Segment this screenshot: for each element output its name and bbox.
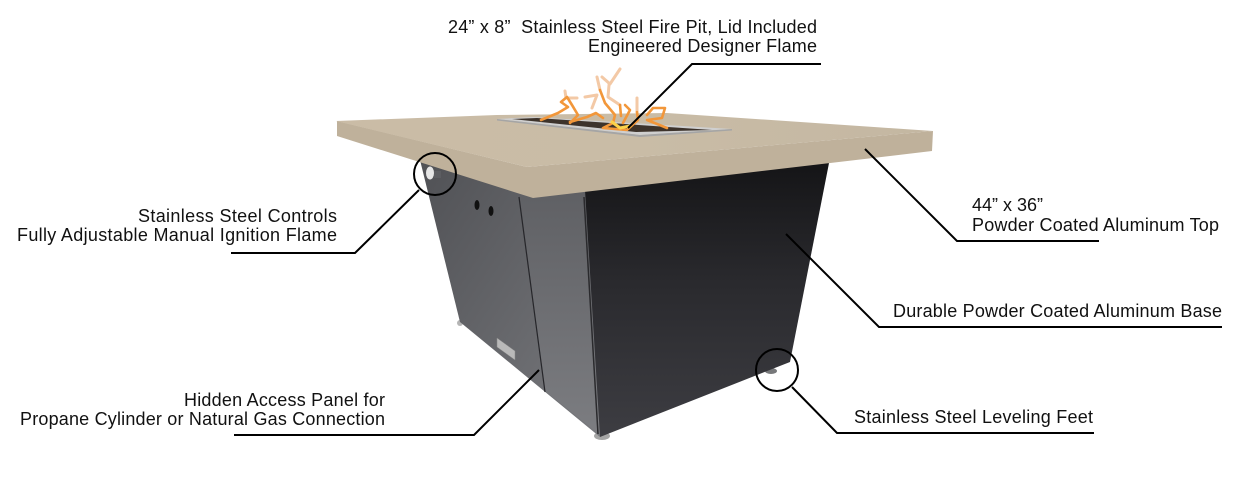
leader line: fire pit xyxy=(628,64,821,128)
table top front edge xyxy=(337,121,933,198)
brand badge xyxy=(497,338,515,360)
callout text: base: Durable Powder Coated Aluminum Base xyxy=(893,301,1222,321)
leader line: aluminum top xyxy=(865,149,1099,241)
callout: controls xyxy=(17,153,456,253)
callout text: fire pit: Engineered Designer Flame xyxy=(588,36,817,56)
leader line: leveling feet xyxy=(792,387,1094,433)
callout text: fire pit: 24” x 8” Stainless Steel Fire Pit, Lid Included xyxy=(448,17,817,37)
table illustration xyxy=(336,69,933,440)
flames xyxy=(541,69,667,130)
callout text: controls: Stainless Steel Controls xyxy=(138,206,337,226)
base left face xyxy=(420,160,600,437)
callout text: leveling feet: Stainless Steel Leveling Feet xyxy=(854,407,1093,427)
pale upper flames xyxy=(565,69,637,112)
callout text: access panel: Propane Cylinder or Natural Gas Connection xyxy=(20,409,385,429)
base right dark face xyxy=(585,158,830,437)
table top surface xyxy=(336,113,933,167)
callout: base xyxy=(786,234,1222,327)
access panel seam xyxy=(519,197,545,392)
bright orange flames xyxy=(541,90,667,130)
callout text: aluminum top xyxy=(972,195,1219,235)
callout text: aluminum top: Powder Coated Aluminum Top xyxy=(972,215,1219,235)
corner seam xyxy=(584,197,598,434)
callout: leveling feet xyxy=(756,349,1094,433)
fire pit burner xyxy=(497,117,732,137)
highlight circle: controls xyxy=(414,153,456,195)
highlight circle: leveling feet xyxy=(756,349,798,391)
callout text: controls xyxy=(17,206,337,245)
callout: aluminum top xyxy=(865,149,1219,241)
callout text: aluminum top: 44” x 36” xyxy=(972,195,1043,215)
callout text: access panel: Hidden Access Panel for xyxy=(184,390,385,410)
leader line: access panel xyxy=(234,370,539,435)
callout text: access panel xyxy=(20,390,385,429)
vent holes xyxy=(474,200,494,216)
callout text: fire pit xyxy=(448,17,817,56)
control knob xyxy=(426,166,441,180)
base center panel xyxy=(519,190,600,435)
leader line: controls xyxy=(231,190,419,253)
callout: access panel xyxy=(20,370,539,435)
leveling feet xyxy=(457,320,777,440)
callout: fire pit xyxy=(448,17,821,128)
callout text: controls: Fully Adjustable Manual Ignition Flame xyxy=(17,225,337,245)
leader line: base xyxy=(786,234,1222,327)
